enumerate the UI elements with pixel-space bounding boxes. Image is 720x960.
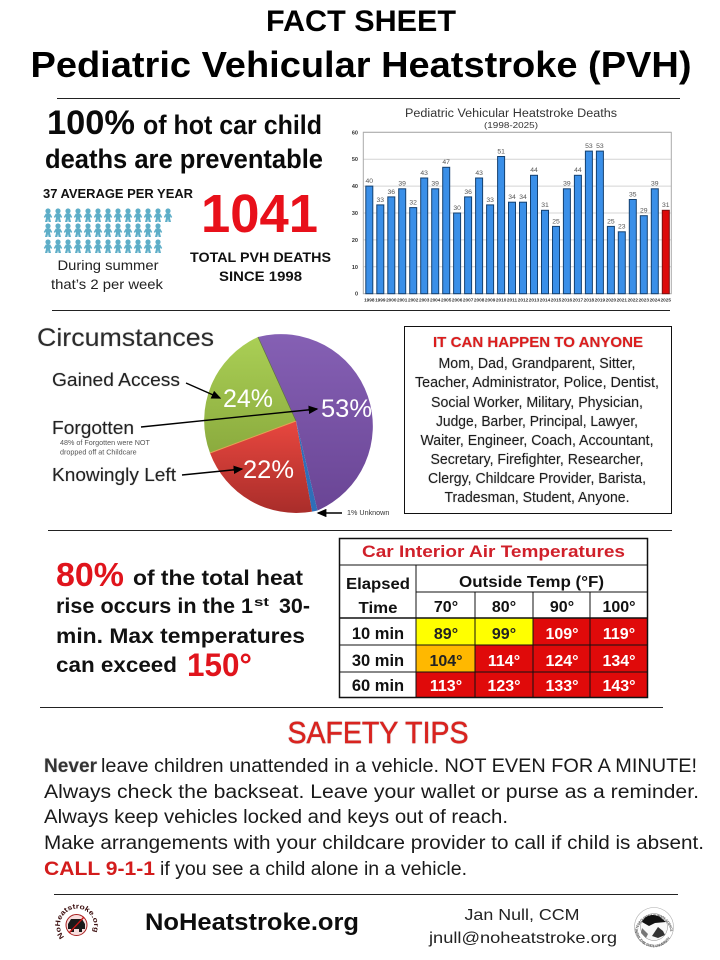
row labels: 30 min: [352, 652, 404, 670]
year axis labels: 2011: [507, 298, 517, 303]
bar value labels: 31: [662, 202, 670, 209]
row labels: [352, 625, 404, 695]
panel: safety tips list: CALL 9-1-1: [44, 859, 155, 880]
bar value labels: 39: [398, 181, 406, 188]
table: car interior air temperatures: [339, 538, 648, 698]
bar value labels: 43: [420, 170, 428, 177]
year axis labels: 1998: [364, 298, 375, 303]
bar value labels: 23: [618, 224, 626, 231]
pie category labels: Knowingly Left: [52, 465, 176, 485]
panel: safety tips list: Never: [44, 756, 98, 777]
bar value labels: 44: [574, 167, 582, 174]
year axis labels: 2003: [419, 298, 430, 303]
pie percentages: [223, 385, 372, 484]
panel: heat rise text: 150°: [187, 647, 252, 683]
temperature values: 109°: [545, 626, 579, 643]
y axis labels: 60: [352, 130, 358, 136]
temperature values: [429, 626, 636, 695]
temperature values: 119°: [603, 626, 635, 643]
unknown label: 1% Unknown: [347, 508, 389, 517]
y axis labels: 10: [352, 265, 358, 271]
table headers: 80°: [492, 599, 516, 616]
panel: safety tips list: leave children unattended in a vehicle. NOT EVEN FOR A MINUTE!: [101, 756, 697, 777]
bar chart: deaths per year: [352, 108, 671, 303]
total deaths number: 1041: [201, 184, 318, 244]
list of people: Tradesman, Student, Anyone.: [444, 490, 630, 506]
bar value labels: 32: [409, 200, 417, 206]
author contact: [428, 907, 617, 947]
year axis labels: 2017: [573, 298, 584, 303]
list of people: Teacher, Administrator, Police, Dentist,: [415, 375, 659, 391]
title: Pediatric Vehicular Heatstroke (PVH): [30, 44, 692, 85]
panel: heat rise text: 30-: [279, 595, 310, 618]
panel: heat rise text: min. Max temperatures: [56, 625, 305, 648]
title: [30, 5, 692, 85]
y axis labels: [352, 130, 358, 298]
total deaths caption: [190, 249, 331, 284]
year axis labels: 2007: [463, 298, 474, 303]
heading: circumstances: Circumstances: [37, 324, 214, 352]
heading: safety tips: SAFETY TIPS: [288, 715, 468, 750]
table headers: 90°: [550, 599, 574, 616]
bar value labels: 40: [366, 178, 373, 185]
year axis labels: 2019: [595, 298, 606, 303]
headline: 100% preventable: [45, 104, 323, 174]
list of people: Mom, Dad, Grandparent, Sitter,: [438, 356, 636, 372]
icon: noheatstroke logo: NoHeatstroke.org: [55, 904, 98, 940]
forgotten footnote: 48% of Forgotten were NOT: [60, 438, 150, 447]
bar value labels: 43: [475, 170, 483, 177]
table headers: Elapsed: [346, 576, 410, 593]
temperature values: 133°: [545, 678, 579, 695]
year axis labels: 2023: [639, 298, 649, 303]
temperature values: 99°: [492, 626, 516, 643]
panel: safety tips list: Always check the backseat. Leave your wallet or purse as a reminder.: [44, 782, 699, 803]
panel: safety tips list: if you see a child alone in a vehicle.: [160, 859, 467, 880]
panel: heat rise text: of the total heat: [133, 567, 303, 590]
temperature values: 104°: [429, 653, 463, 670]
bar value labels: 29: [640, 208, 648, 215]
y axis labels: 50: [352, 157, 358, 163]
list of people: Clergy, Childcare Provider, Barista,: [428, 471, 646, 487]
temperature values: 113°: [430, 678, 462, 695]
year axis labels: 2010: [496, 298, 507, 303]
pie category labels: Gained Access: [52, 370, 180, 390]
year axis labels: 2012: [518, 298, 529, 303]
year axis labels: 2009: [485, 298, 496, 303]
bar value labels: 25: [552, 218, 560, 225]
headline: 100% preventable: 100%: [47, 104, 135, 142]
row labels: 10 min: [352, 625, 404, 643]
year axis labels: 2000: [386, 298, 397, 303]
panel: circumstances pie chart: [37, 324, 389, 517]
panel: key statistics: [43, 104, 331, 292]
bar value labels: 47: [442, 159, 450, 166]
table headers: 70°: [434, 599, 458, 616]
chart title: Pediatric Vehicular Heatstroke Deaths: [405, 108, 617, 120]
year axis labels: 2001: [397, 298, 408, 303]
bar value labels: 44: [530, 167, 538, 174]
author contact: jnull@noheatstroke.org: [428, 930, 617, 947]
website: NoHeatstroke.org: [145, 909, 359, 936]
panel: it can happen to anyone: [404, 326, 672, 514]
table headers: Time: [358, 600, 398, 617]
bar value labels: 51: [497, 148, 505, 155]
y axis labels: 40: [352, 184, 358, 190]
temperature values: 89°: [434, 626, 458, 643]
grid lines: [339, 538, 648, 698]
year axis labels: 2020: [606, 298, 617, 303]
bars: [366, 151, 669, 294]
bar value labels: 31: [541, 202, 549, 209]
panel: safety tips list: [44, 756, 704, 880]
bar value labels: 39: [651, 181, 659, 188]
chart title: (1998-2025): [484, 121, 538, 130]
temperature values: 134°: [602, 653, 636, 670]
bar value labels: 36: [464, 189, 472, 196]
bar value labels: [366, 143, 670, 231]
year axis labels: [364, 298, 671, 303]
y axis labels: 20: [352, 238, 358, 244]
year axis labels: 2021: [617, 298, 627, 303]
cell colors: [416, 618, 648, 697]
year axis labels: 2008: [474, 298, 485, 303]
bar value labels: 30: [453, 205, 461, 212]
panel: heat rise text: [56, 556, 310, 683]
icon: meteorology seal: SAN JOSE STATE UNIVERSITY: [636, 932, 670, 948]
temperature values: 114°: [488, 653, 520, 670]
year axis labels: 2014: [540, 298, 551, 303]
row labels: 60 min: [352, 677, 404, 695]
list of people: [415, 356, 659, 506]
year axis labels: 2025: [661, 298, 671, 303]
bar value labels: 25: [607, 218, 615, 225]
bar value labels: 36: [388, 189, 395, 196]
year axis labels: 2018: [584, 298, 595, 303]
bar value labels: 34: [519, 194, 527, 201]
box heading: IT CAN HAPPEN TO ANYONE: [433, 334, 643, 351]
forgotten footnote: dropped off at Childcare: [60, 448, 137, 456]
forgotten footnote: [60, 438, 150, 456]
year axis labels: 2016: [562, 298, 573, 303]
panel: safety tips list: Always keep vehicles locked and keys out of reach.: [44, 807, 508, 828]
panel: safety tips list: Make arrangements with your childcare provider to call if child is absent.: [44, 833, 704, 854]
list of people: Waiter, Engineer, Coach, Accountant,: [420, 433, 654, 449]
year axis labels: 2024: [650, 298, 660, 303]
icon: meteorology seal: METEOROLOGY & CLIMATE SCIENCE: [635, 914, 673, 933]
year axis labels: 1999: [375, 298, 386, 303]
bar value labels: 33: [377, 197, 384, 204]
pie percentages: 22%: [243, 456, 294, 484]
year axis labels: 2013: [529, 298, 540, 303]
bar value labels: 35: [629, 191, 637, 198]
summer rate note: During summer: [58, 257, 159, 273]
title: FACT SHEET: [266, 5, 456, 38]
pie category labels: Forgotten: [52, 418, 134, 438]
bar value labels: 34: [508, 194, 516, 201]
average per year label: 37 AVERAGE PER YEAR: [43, 187, 193, 201]
y axis labels: 0: [355, 292, 358, 298]
leader arrows: [141, 383, 342, 513]
table headers: Outside Temp (°F): [459, 574, 604, 591]
pie chart: [204, 334, 373, 513]
year axis labels: 2022: [628, 298, 638, 303]
bar value labels: 53: [585, 143, 593, 150]
total deaths caption: TOTAL PVH DEATHS: [190, 249, 331, 265]
list of people: Secretary, Firefighter, Researcher,: [430, 452, 644, 468]
year axis labels: 2005: [441, 298, 452, 303]
total deaths caption: SINCE 1998: [219, 268, 302, 284]
headline: 100% preventable: of hot car child: [143, 110, 322, 140]
year axis labels: 2006: [452, 298, 463, 303]
icon: meteorology seal: [634, 907, 674, 948]
pie percentages: 53%: [321, 395, 372, 423]
author contact: Jan Null, CCM: [464, 907, 580, 924]
year axis labels: 2015: [551, 298, 562, 303]
temperature values: 124°: [545, 653, 579, 670]
table headers: 100°: [602, 599, 636, 616]
bar value labels: 39: [563, 181, 571, 188]
panel: heat rise text: can exceed: [56, 654, 177, 677]
bar value labels: 33: [486, 197, 494, 204]
headline: 100% preventable: deaths are preventable: [45, 144, 323, 174]
list of people: Social Worker, Military, Physician,: [431, 395, 643, 411]
list of people: Judge, Barber, Principal, Lawyer,: [436, 414, 638, 430]
table headers: [346, 574, 636, 617]
panel: heat rise text: 80%: [56, 556, 124, 593]
y axis labels: 30: [352, 211, 358, 217]
year axis labels: 2004: [430, 298, 441, 303]
year axis labels: 2002: [408, 298, 419, 303]
table title: Car Interior Air Temperatures: [362, 542, 625, 561]
panel: footer: [55, 904, 674, 948]
bar value labels: 39: [431, 181, 439, 188]
pie category labels: [52, 370, 180, 485]
panel: heat rise text: st: [254, 595, 269, 609]
summer rate note: that’s 2 per week: [51, 276, 164, 292]
panel: heat rise text: rise occurs in the 1: [56, 595, 253, 618]
temperature values: 123°: [487, 678, 521, 695]
chart title: [405, 108, 617, 130]
icon: 37 child figures: [44, 208, 172, 253]
temperature values: 143°: [602, 678, 636, 695]
bar value labels: 53: [596, 143, 604, 150]
pie percentages: 24%: [223, 385, 273, 413]
summer rate note: [51, 257, 164, 292]
